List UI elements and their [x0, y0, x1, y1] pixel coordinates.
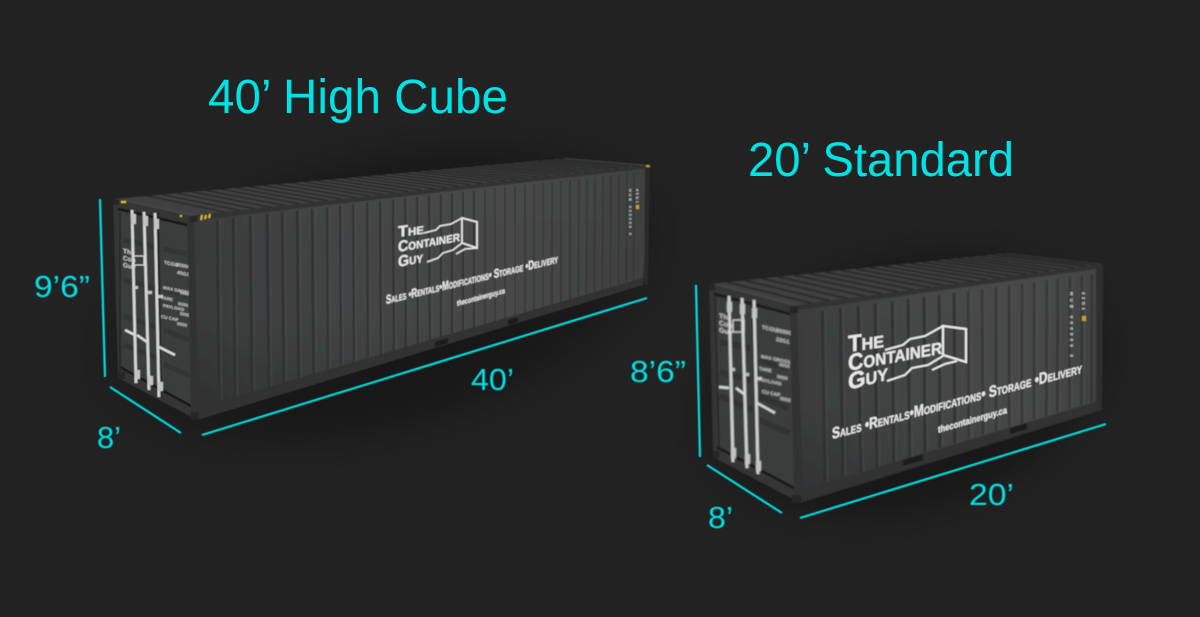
shadow: 20 foot container: [616, 160, 1194, 610]
door seam and panel corrugation: [158, 213, 161, 398]
container side panel: [190, 165, 650, 420]
door white lock bars: [719, 296, 775, 474]
far end markings on 40 foot container: [628, 165, 650, 235]
door seam and panel corrugation: [752, 300, 757, 476]
door face: [113, 199, 211, 420]
logo wavy strokes: [424, 218, 477, 262]
services text on 20 foot container: Sales •Rentals•Modifications• Storage •Delivery: [832, 359, 1082, 443]
door markings text: 0000: [779, 362, 790, 370]
logo: side of 20 foot container: Guy: [848, 359, 889, 396]
dimension: 40 foot length line: [202, 298, 647, 435]
door markings text: 000000: [776, 328, 794, 338]
dimension: 40 foot height label: 9’6”: [34, 269, 90, 304]
door markings text: [759, 325, 794, 404]
logo box outline: [943, 326, 966, 362]
near corner post: [790, 306, 803, 503]
door markings text: CU CAP: [161, 314, 178, 322]
container top roof: [113, 158, 650, 216]
door markings text: 0000: [777, 374, 788, 382]
far end markings on 40 foot container: HUB 000000 0: [628, 189, 632, 235]
door markings text: TCGU: [164, 260, 178, 269]
far corner post: [644, 165, 650, 285]
container side panel: [793, 260, 1103, 503]
door markings text: TARE: [759, 366, 772, 375]
logo: side of 40 foot container: Container: [398, 228, 460, 256]
dimension: 20 foot height label: 8’6”: [630, 354, 686, 389]
door markings text: TARE: [161, 295, 173, 302]
logo: side of 40 foot container: Guy: [398, 249, 424, 271]
door markings text: PAYLOAD: [163, 303, 185, 312]
door markings text: MAX GROSS: [163, 285, 190, 295]
dimension: 20 foot width label: 8’: [708, 500, 733, 535]
forklift pockets: [435, 317, 518, 347]
door face: [709, 284, 803, 503]
door top and bottom bands: [118, 209, 191, 406]
dimension: 20 foot length label: 20’: [969, 477, 1014, 512]
door markings text: 0000: [180, 290, 190, 297]
logo box outline: [462, 218, 477, 248]
far end markings on 40 foot container: 45G1: [635, 189, 639, 203]
dimension: 20 foot length line: [800, 424, 1106, 518]
door logo text: [123, 248, 144, 272]
forklift pockets: [903, 423, 1027, 466]
far end markings on 20 foot container: 22G1: [1081, 292, 1086, 310]
door markings text: 0000: [177, 321, 187, 328]
corner castings: [709, 284, 801, 503]
logo: side of 40 foot container: The: [398, 221, 424, 241]
dimension: 40 foot height line: [100, 199, 105, 377]
website text on 20 foot container: thecontainerguy.ca: [938, 405, 1007, 436]
door markings text: 0000: [180, 311, 190, 318]
container: 40 foot high cube: [34, 158, 1106, 535]
door markings text: 0000: [780, 396, 791, 404]
door logo text: The: [123, 248, 135, 257]
door markings text: CU CAP: [762, 389, 781, 399]
logo: side of 20 foot container: Container: [848, 334, 942, 377]
door markings text: TCGU: [762, 325, 778, 334]
far end markings on 20 foot container: [1069, 292, 1086, 357]
door markings text: 0000: [178, 301, 188, 308]
door markings text: PAYLOAD: [759, 377, 782, 388]
door logo text: Con: [719, 319, 733, 330]
container: 20 foot standard: [709, 253, 1103, 503]
services text on 40 foot container: Sales •Rentals•Modifications• Storage •Delivery: [386, 252, 558, 307]
dimension: 40 foot length label: 40’: [471, 362, 514, 397]
website text on 40 foot container: thecontainerguy.ca: [457, 286, 506, 308]
far corner post: [1096, 264, 1103, 412]
logo: side of 20 foot container: [848, 326, 966, 396]
logo wavy strokes: [885, 326, 957, 381]
door markings text: MAX GROSS: [761, 354, 791, 366]
logo: side of 20 foot container: The: [848, 327, 884, 358]
door markings text: 000000: [176, 262, 193, 271]
door top and bottom bands: [714, 294, 794, 488]
shadow: 40 foot container: [1, 37, 759, 553]
far end markings on 20 foot container: HUB 000000 0: [1069, 292, 1074, 357]
corner castings: [113, 199, 199, 420]
dimension: 20 foot height line: [696, 285, 700, 457]
door logo text: Con: [123, 255, 136, 265]
door white lock bars: [125, 210, 175, 397]
door markings text: 22G1: [776, 337, 789, 346]
door markings text: [161, 260, 193, 328]
title: 20 foot standard: 20’ Standard: [748, 134, 1014, 187]
title: 40 foot high cube: 40’ High Cube: [208, 71, 508, 124]
door logo text: The: [719, 312, 731, 323]
door logo text: [719, 312, 744, 337]
near corner post: [187, 216, 199, 420]
dimension: 40 foot width label: 8’: [97, 420, 121, 455]
door logo text: Guy: [719, 326, 733, 337]
logo: side of 40 foot container: [398, 218, 477, 271]
dimension: 20 foot width line: [707, 465, 782, 513]
container top roof: [709, 253, 1103, 306]
hazard stripes: [121, 201, 211, 220]
door logo text: Guy: [123, 262, 136, 272]
dimension: 40 foot width line: [110, 387, 181, 433]
door markings text: 45G1: [177, 270, 189, 278]
